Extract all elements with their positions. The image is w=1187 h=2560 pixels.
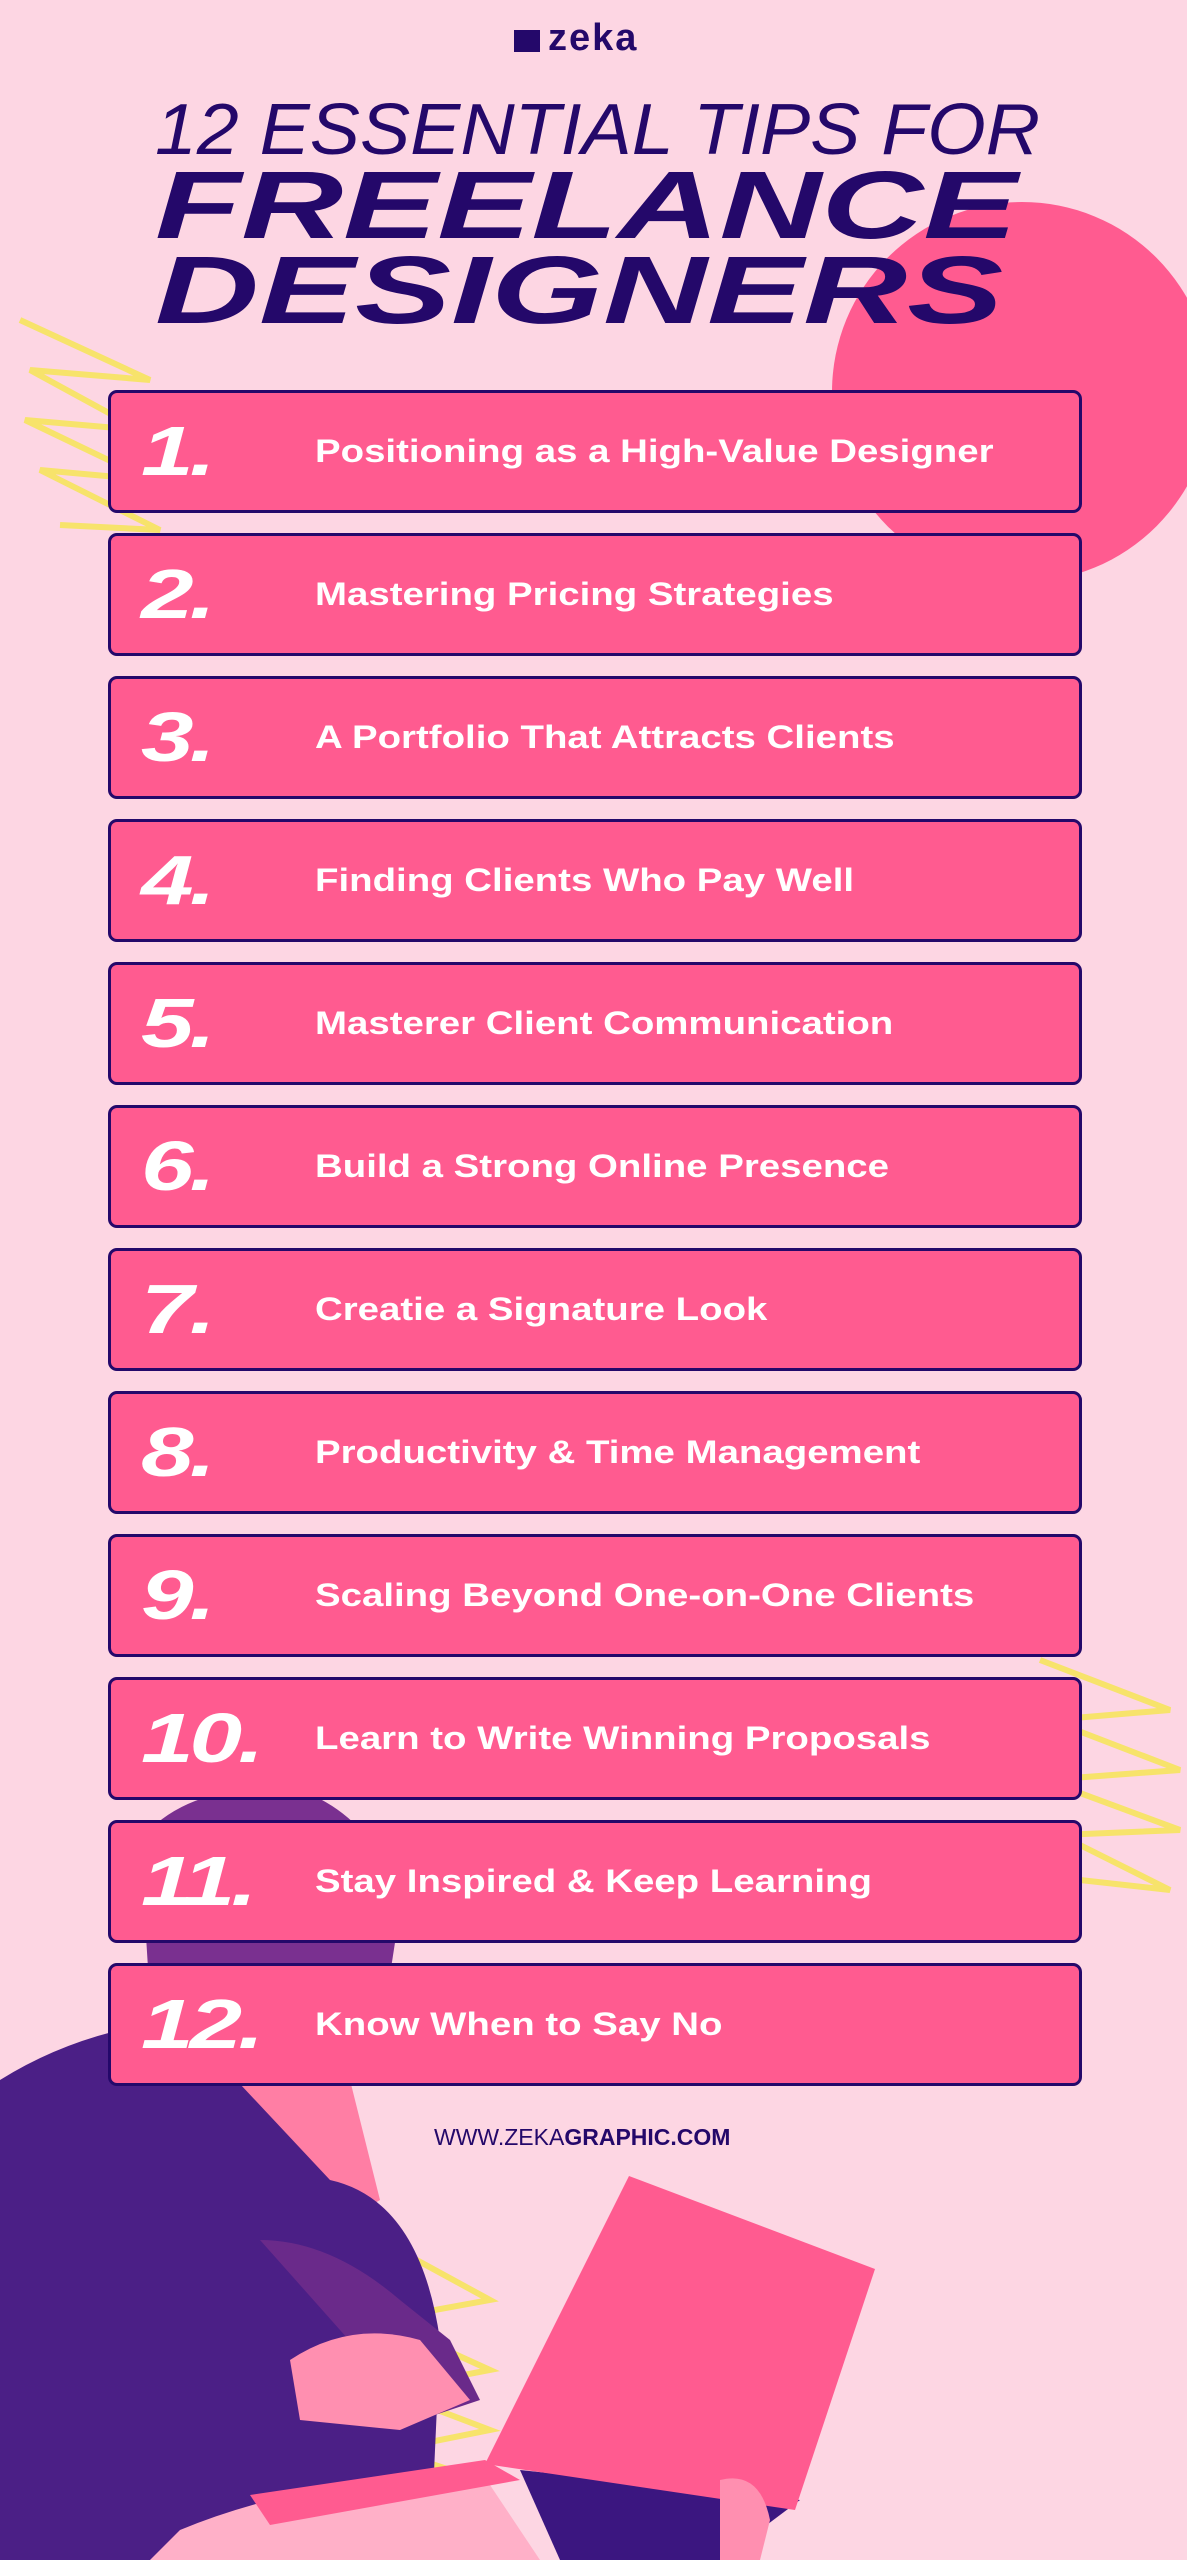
tip 12: 12.: [141, 1985, 260, 2063]
tip 3: 3.: [141, 698, 212, 776]
tip 2: 2.: [141, 555, 212, 633]
tip 4: Finding Clients Who Pay Well: [315, 862, 854, 898]
title: DESIGNERS: [155, 237, 1003, 344]
tip 7: 7.: [141, 1270, 212, 1348]
tip 1: [108, 390, 1082, 513]
tip 10: [108, 1677, 1082, 1800]
tip 10: 10.: [141, 1699, 260, 1777]
yellow scribble top left: [18, 317, 162, 533]
tip 5: 5.: [141, 984, 212, 1062]
yellow scribble bottom: [418, 2257, 501, 2468]
tip 2: [108, 533, 1082, 656]
tip 5: [108, 962, 1082, 1085]
tip 6: [108, 1105, 1082, 1228]
tip 6: Build a Strong Online Presence: [315, 1148, 889, 1184]
tip 8: Productivity & Time Management: [315, 1434, 920, 1470]
tip 4: 4.: [141, 841, 212, 919]
tip 6: 6.: [141, 1127, 212, 1205]
tip 1: 1.: [141, 412, 212, 490]
yellow scribble right: [1039, 1657, 1181, 1893]
title: FREELANCE: [155, 152, 1017, 259]
tip 8: 8.: [141, 1413, 212, 1491]
title: 12 ESSENTIAL TIPS FOR: [155, 90, 1040, 170]
tip 3: [108, 676, 1082, 799]
website url: WWW.ZEKAGRAPHIC.COM: [434, 2124, 730, 2150]
tip 2: Mastering Pricing Strategies: [315, 576, 834, 612]
tip 12: Know When to Say No: [315, 2006, 722, 2042]
title: [155, 90, 1040, 344]
illustration: person with laptop: [0, 1800, 875, 2560]
decorative circle: [832, 202, 1187, 582]
logo: zeka: [548, 17, 638, 59]
tip 9: [108, 1534, 1082, 1657]
tip 3: A Portfolio That Attracts Clients: [315, 719, 895, 755]
tip 12: [108, 1963, 1082, 2086]
tip 7: Creatie a Signature Look: [315, 1291, 767, 1327]
tip 10: Learn to Write Winning Proposals: [315, 1720, 931, 1756]
tip 11: Stay Inspired & Keep Learning: [315, 1863, 872, 1899]
tip 4: [108, 819, 1082, 942]
tip 9: Scaling Beyond One-on-One Clients: [315, 1577, 974, 1613]
tip 1: Positioning as a High-Value Designer: [315, 433, 994, 469]
tip 11: [108, 1820, 1082, 1943]
tip 8: [108, 1391, 1082, 1514]
tip 9: 9.: [141, 1556, 212, 1634]
tip 5: Masterer Client Communication: [315, 1005, 893, 1041]
tip 7: [108, 1248, 1082, 1371]
tip 11: 11.: [141, 1842, 253, 1920]
